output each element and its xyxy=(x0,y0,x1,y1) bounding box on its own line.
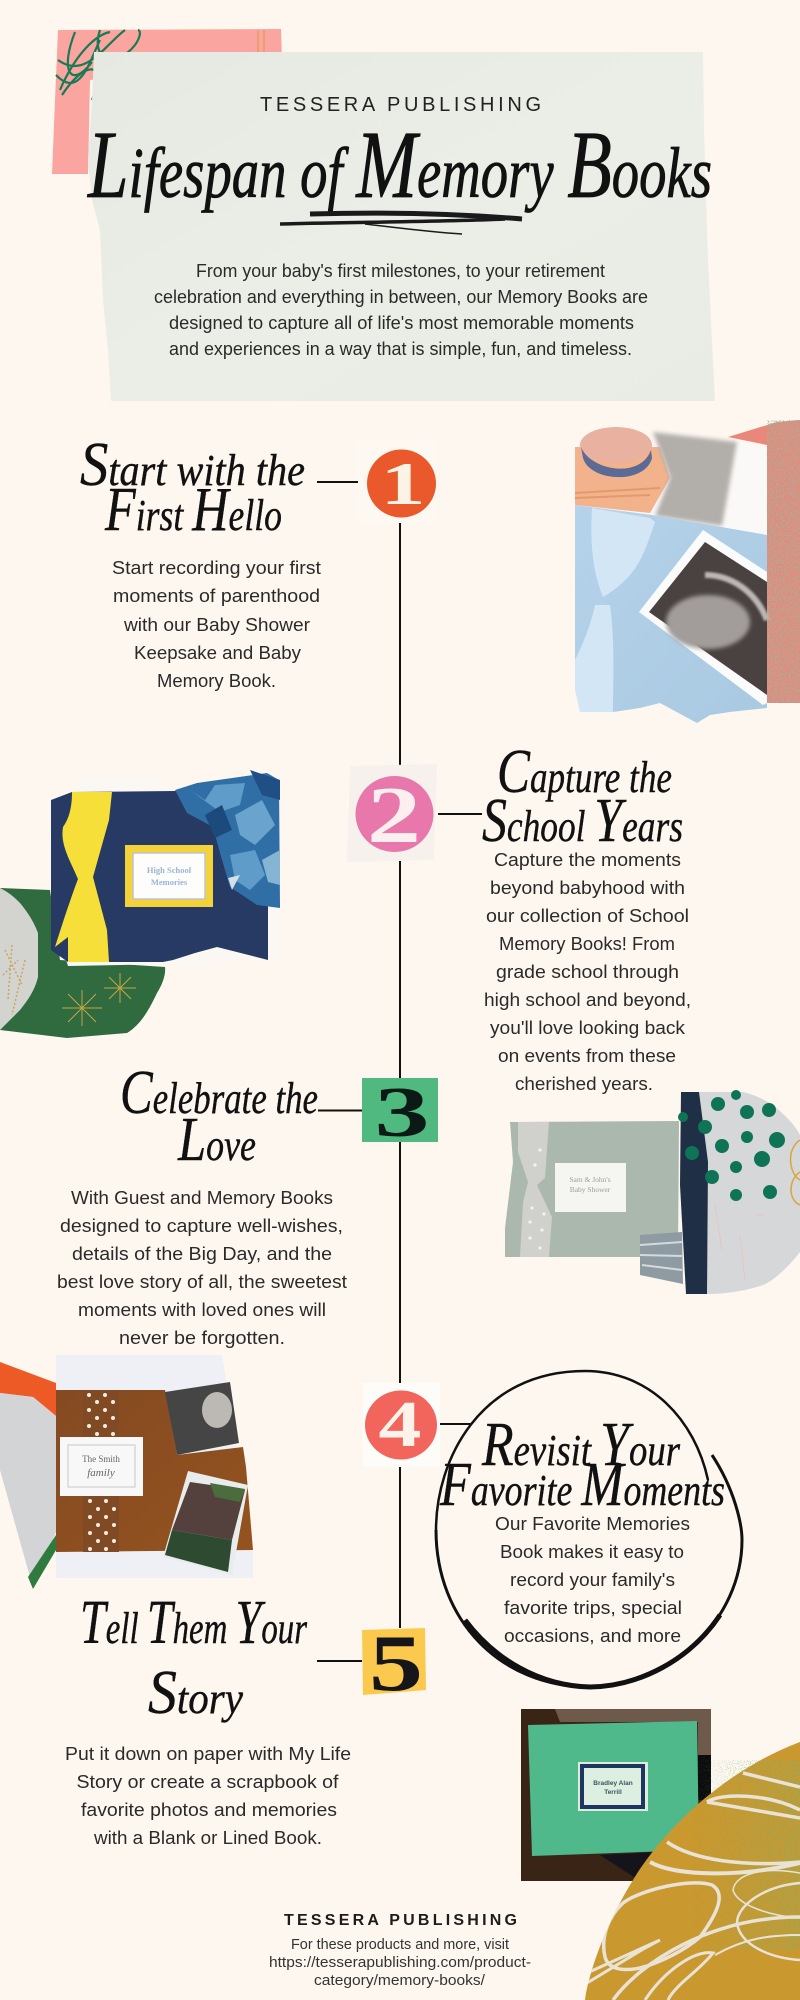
step 2 body: cherished years. xyxy=(515,1074,653,1094)
step 2 connector xyxy=(438,813,482,815)
step 2 body: grade school through xyxy=(496,962,679,982)
step 4 hand drawn circle xyxy=(436,1371,742,1687)
step 3 number badge: 3 xyxy=(374,1073,430,1152)
label: The Smith xyxy=(82,1454,120,1464)
step 3 photo: baby shower guest book xyxy=(505,1121,683,1284)
intro paragraph: celebration and everything in between, our Memory Books are xyxy=(154,287,648,307)
step 2 body: on events from these xyxy=(498,1046,676,1066)
intro paragraph: From your baby's first milestones, to your retirement xyxy=(196,261,605,281)
blue crumpled flowers xyxy=(175,770,280,908)
book label xyxy=(555,1163,626,1212)
step 2 number badge: 2 xyxy=(367,770,421,860)
pink textured strip xyxy=(728,420,800,703)
step 2 heading: School Years xyxy=(482,787,683,855)
step 1 connector xyxy=(317,481,358,483)
step 5 connector xyxy=(317,1660,362,1662)
step 5 body: with a Blank or Lined Book. xyxy=(93,1828,322,1848)
footer link text: For these products and more, visit xyxy=(291,1937,509,1953)
step 2 body: beyond babyhood with xyxy=(490,878,685,898)
step 1 number badge xyxy=(355,439,437,523)
step 4 photo: family memory book xyxy=(56,1355,253,1578)
step 1 photo collage: baby ultrasound book xyxy=(575,420,800,723)
bottom right gold blob with white scribbles xyxy=(585,1742,800,2000)
header: torn grey paper panel xyxy=(88,52,715,401)
house photo xyxy=(163,1471,248,1575)
step 3 connector xyxy=(318,1110,362,1112)
step 5 photo: green memory book xyxy=(521,1709,711,1881)
step 5 heading: Story xyxy=(148,1659,243,1727)
footer publisher name: TESSERA PUBLISHING xyxy=(284,1912,517,1929)
step 5 body: favorite photos and memories xyxy=(81,1800,337,1820)
step 3 heading xyxy=(120,1059,318,1174)
timeline vertical line xyxy=(399,523,401,1628)
step 3 body xyxy=(57,1188,347,1348)
step 2 body: high school and beyond, xyxy=(484,990,691,1010)
step 1 heading xyxy=(80,431,305,544)
step 1 body xyxy=(112,558,321,691)
step 1 number badge: 1 xyxy=(381,451,425,517)
step 3 body: moments with loved ones will xyxy=(78,1300,326,1320)
step 3 decoration: grey blob, navy strip, green dots xyxy=(678,1090,800,1294)
step 2 number badge xyxy=(347,764,437,862)
step 3 body: With Guest and Memory Books xyxy=(71,1188,333,1208)
step 5 heading: Tell Them Your xyxy=(80,1589,308,1657)
step 1 body: Keepsake and Baby xyxy=(134,643,301,663)
polka dot ribbon xyxy=(518,1122,552,1257)
step 4 decoration: orange, grey and green shards xyxy=(0,1362,56,1589)
intro paragraph: designed to capture all of life's most memorable moments xyxy=(169,313,634,333)
step 2 body: Capture the moments xyxy=(494,850,681,870)
step 3 body: never be forgotten. xyxy=(119,1328,285,1348)
label: family xyxy=(87,1467,115,1479)
book label: Memories xyxy=(151,877,188,887)
step 5 photo: green memory book: Bradley Alan xyxy=(593,1780,633,1787)
step 2 body: our collection of School xyxy=(486,906,689,926)
step 3 body: best love story of all, the sweetest xyxy=(57,1272,347,1292)
step 3 heading: Love xyxy=(177,1106,256,1174)
step 4 body: record your family's xyxy=(510,1570,675,1590)
book label xyxy=(125,845,213,907)
header: torn pink paper with green scribble xyxy=(52,29,282,174)
title underline brush stroke xyxy=(280,213,522,234)
step 5 body: Story or create a scrapbook of xyxy=(76,1772,340,1792)
step 4 heading: Revisit Your xyxy=(481,1411,681,1479)
yellow ribbon xyxy=(55,792,112,962)
footer link text: category/memory-books/ xyxy=(314,1973,486,1989)
step 5 heading xyxy=(80,1589,308,1727)
step 2 heading xyxy=(482,738,683,855)
step 2 body xyxy=(484,850,691,1094)
step 1 body: Memory Book. xyxy=(157,671,276,691)
step 1 body: Start recording your first xyxy=(112,558,321,578)
book label: Baby Shower xyxy=(570,1185,611,1194)
book label: Sam & John's xyxy=(569,1175,611,1184)
step 4 heading: Favorite Moments xyxy=(439,1451,725,1519)
step 4 body xyxy=(495,1514,690,1646)
step 5 body: Put it down on paper with My Life xyxy=(65,1744,351,1764)
title: Lifespan of Memory Books xyxy=(86,111,712,218)
satin ribbon xyxy=(575,508,655,712)
footer link text xyxy=(269,1937,531,1989)
polka dot ribbon xyxy=(83,1390,119,1552)
intro paragraph xyxy=(154,261,648,359)
step 4 body: Our Favorite Memories xyxy=(495,1514,690,1534)
baby photo xyxy=(165,1382,239,1455)
step 1 body: with our Baby Shower xyxy=(123,615,310,635)
step 3 heading: Celebrate the xyxy=(120,1059,318,1127)
step 2 photo: high school memory book xyxy=(51,770,280,966)
ultrasound print xyxy=(639,530,767,705)
book label: High School xyxy=(147,865,192,875)
intro paragraph: and experiences in a way that is simple, fun, and timeless. xyxy=(169,339,632,359)
step 3 body: designed to capture well-wishes, xyxy=(60,1216,343,1236)
header text xyxy=(86,94,712,359)
step 3 body: details of the Big Day, and the xyxy=(72,1244,332,1264)
footer xyxy=(269,1912,531,1989)
step 2 body: you'll love looking back xyxy=(490,1018,686,1038)
step 5 photo: green memory book: Terrill xyxy=(604,1789,622,1796)
peach, fringe and white top photo xyxy=(575,427,767,540)
blue book cover xyxy=(575,505,767,723)
step 4 body: Book makes it easy to xyxy=(500,1542,684,1562)
step 5 number badge: 5 xyxy=(369,1618,423,1708)
step 2 heading: Capture the xyxy=(497,738,672,806)
green dots xyxy=(678,1090,785,1201)
publisher name: TESSERA PUBLISHING xyxy=(260,94,541,116)
footer link text: https://tesserapublishing.com/product- xyxy=(269,1955,531,1971)
step 2 body: Memory Books! From xyxy=(499,934,675,954)
step 4 number badge xyxy=(363,1383,440,1467)
step 4 body: occasions, and more xyxy=(504,1626,681,1646)
step 1 heading: Start with the xyxy=(80,431,305,499)
step 1 body: moments of parenthood xyxy=(113,586,320,606)
step 4 connector xyxy=(440,1423,472,1425)
step 1 heading: First Hello xyxy=(104,476,282,544)
step 4 number badge: 4 xyxy=(379,1387,421,1461)
step 4 heading xyxy=(439,1411,725,1519)
step 2 decoration: green blob with grey circle and gold stars xyxy=(0,888,165,1038)
step 4 body: favorite trips, special xyxy=(504,1598,682,1618)
label xyxy=(60,1437,143,1496)
step 5 body xyxy=(65,1744,351,1848)
